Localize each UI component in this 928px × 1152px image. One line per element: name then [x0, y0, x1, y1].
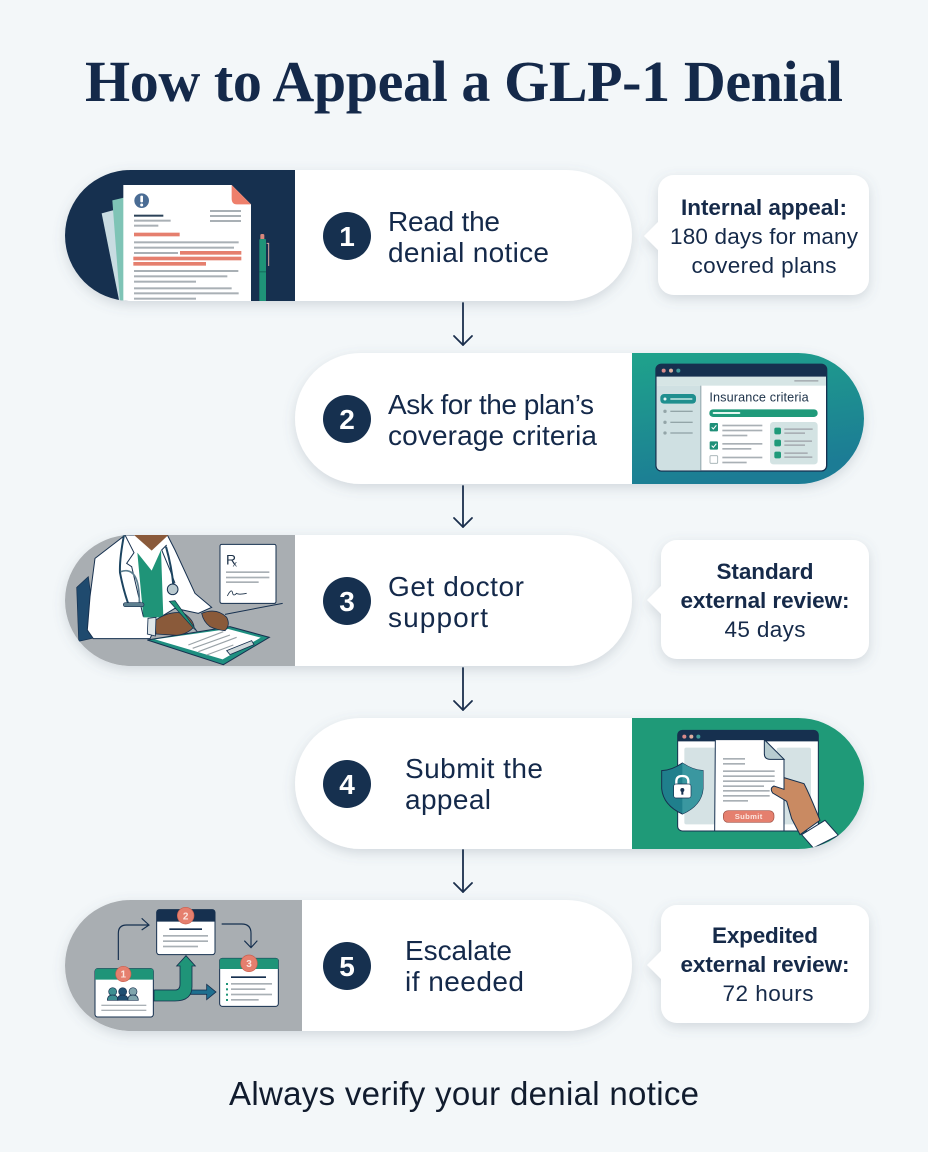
- step 3 panel: [65, 535, 632, 666]
- step number 3: 3: [339, 586, 355, 617]
- step number 2: [323, 395, 371, 443]
- step number 1: [323, 212, 371, 260]
- callout: internal appeal: 180 days for many: [670, 224, 859, 249]
- callout: standard external review: [647, 540, 869, 659]
- step 5 panel: [65, 900, 632, 1031]
- icon: denial notice document: [65, 170, 295, 302]
- icon: submit document online: [632, 718, 864, 849]
- icon: escalation flow: 3: [246, 959, 252, 970]
- step number 4: 4: [339, 769, 355, 800]
- callout: internal appeal: [644, 175, 869, 295]
- callout: expedited external review: Expedited: [712, 923, 818, 948]
- step number 5: 5: [339, 951, 355, 982]
- icon: escalation flow: 2: [183, 911, 189, 922]
- callout: internal appeal: covered plans: [692, 253, 836, 278]
- step 2 label: Ask for the plan’s: [388, 389, 594, 420]
- icon: doctor writing prescription: [65, 535, 295, 666]
- step 3 label: support: [388, 602, 488, 633]
- step 5 label: Escalate: [405, 935, 512, 966]
- arrow 2 to 3: [454, 486, 472, 527]
- step number 3: [323, 577, 371, 625]
- step 4 panel: [295, 718, 864, 849]
- step number 5: [323, 942, 371, 990]
- icon: submit document online: Submit: [735, 812, 763, 821]
- step 1 panel: [65, 170, 632, 302]
- icon: doctor writing prescription: R: [226, 552, 236, 568]
- icon: insurance criteria window: Insurance criteria: [709, 391, 810, 405]
- step number 4: [323, 760, 371, 808]
- step 1 label: Read the: [388, 206, 500, 237]
- callout: expedited external review: 72 hours: [722, 981, 814, 1006]
- step 5 label: [405, 935, 524, 997]
- arrow 3 to 4: [454, 668, 472, 710]
- step 4 label: [405, 753, 543, 815]
- icon: escalation flow: [65, 900, 302, 1031]
- arrow 4 to 5: [454, 850, 472, 892]
- step 1 label: denial notice: [388, 237, 549, 268]
- icon: doctor writing prescription: x: [233, 559, 238, 569]
- callout: internal appeal: Internal appeal:: [681, 195, 847, 220]
- step number 1: 1: [339, 221, 355, 252]
- step 4 label: Submit the: [405, 753, 543, 784]
- step 2 panel: [295, 353, 864, 484]
- step 1 label: [388, 206, 549, 268]
- footer note: Always verify your denial notice: [229, 1075, 699, 1112]
- callout: standard external review: external review:: [680, 588, 850, 613]
- callout: expedited external review: external review:: [680, 952, 850, 977]
- icon: escalation flow: 1: [121, 970, 127, 981]
- step 2 label: [388, 389, 597, 451]
- step 3 label: Get doctor: [388, 571, 524, 602]
- callout: expedited external review: [647, 905, 869, 1023]
- arrow 1 to 2: [454, 303, 472, 345]
- step 3 label: [388, 571, 524, 633]
- callout: standard external review: 45 days: [724, 617, 806, 642]
- step number 2: 2: [339, 404, 355, 435]
- icon: insurance criteria window: [632, 353, 864, 484]
- step 4 label: appeal: [405, 784, 491, 815]
- callout: standard external review: Standard: [716, 559, 814, 584]
- title: How to Appeal a GLP-1 Denial: [85, 49, 843, 114]
- step 5 label: if needed: [405, 966, 524, 997]
- step 2 label: coverage criteria: [388, 420, 597, 451]
